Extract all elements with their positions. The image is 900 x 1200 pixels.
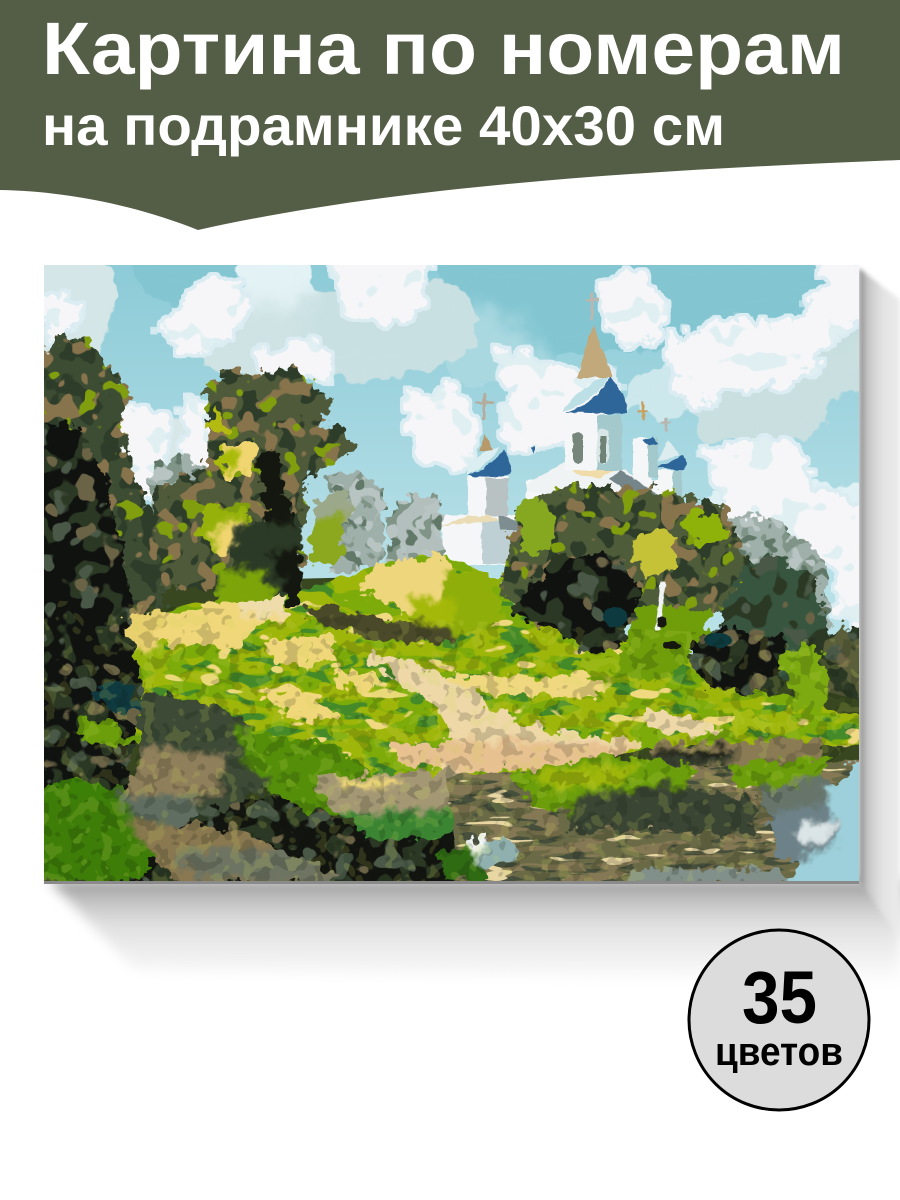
subtitle: на подрамнике 40х30 см (42, 94, 725, 157)
icon: blue domes (467, 376, 685, 477)
painting: right tree (720, 552, 859, 700)
painting: clouds (44, 265, 859, 508)
painting: bush highlights and dark core (510, 497, 828, 712)
painting: sky (44, 265, 859, 654)
badge label: цветов (715, 1030, 843, 1074)
painting: church (442, 293, 685, 565)
canvas shadow (44, 268, 900, 985)
painting: stream and ripples left (311, 742, 480, 838)
painting: lower-left bank and path (44, 691, 460, 881)
painting: middle tree (147, 368, 357, 590)
painting: left dark trees (44, 332, 172, 790)
painting (20, 250, 880, 895)
painting: centre bushes (500, 485, 745, 625)
painting: grey background trees (150, 455, 830, 630)
painting: ground underlay (44, 575, 859, 881)
badge number: 35 (742, 956, 817, 1039)
painting: water (440, 755, 870, 895)
painting: hill (134, 554, 859, 778)
painting: bank strip right (646, 736, 824, 768)
header banner (0, 0, 900, 230)
painting: paint-by-number texture overlay (44, 600, 859, 881)
title: Картина по номерам (42, 7, 845, 90)
painting: middle tree details (198, 410, 350, 605)
painting: hill highlights (77, 556, 790, 775)
badge: colours count (689, 930, 869, 1110)
